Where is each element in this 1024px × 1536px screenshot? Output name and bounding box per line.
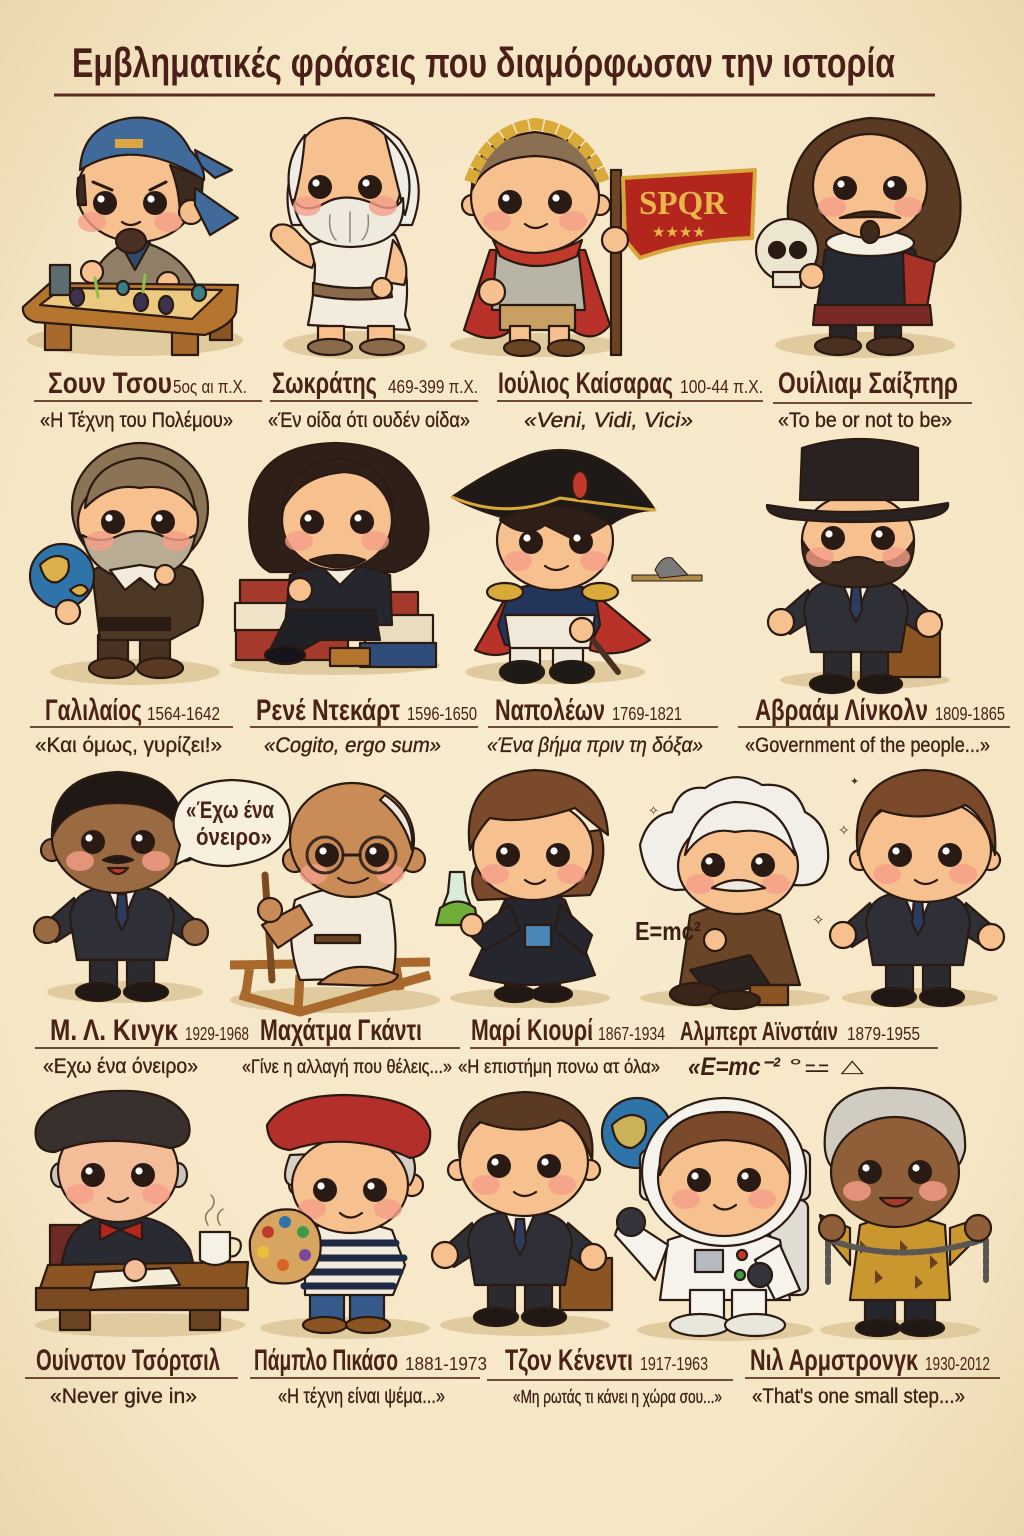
label: Descartes: «Cogito, ergo sum» <box>262 734 443 757</box>
label: Napoleon: 1769-1821 <box>612 704 682 724</box>
figure: Gandhi on wooden frame <box>230 783 440 1013</box>
icon: small cannon <box>632 558 702 581</box>
label: M. L. King: 1929-1968 <box>185 1024 249 1044</box>
label: Shakespeare: Ουίλιαμ Σαίξπηρ <box>778 367 958 400</box>
equation: E=mc2: ✧ <box>812 911 825 929</box>
label: Descartes: Ρενέ Ντεκάρτ <box>256 694 400 727</box>
equation: E=mc2: E=mc² <box>635 916 701 946</box>
figure: Picasso with palette <box>250 1095 430 1339</box>
label: Napoleon <box>487 694 718 757</box>
label: Sun Tzu: 5ος αι π.Χ. <box>173 377 247 397</box>
label: Napoleon: Ναπολέων <box>495 694 605 727</box>
label: Einstein: Αλμπερτ Αϊνστάιν <box>680 1016 838 1046</box>
figure: Churchill at desk <box>35 1091 248 1337</box>
label: Neil Armstrong: 1930-2012 <box>925 1354 990 1374</box>
label: Churchill: «Never give in» <box>50 1385 197 1408</box>
equation: E=mc2 <box>635 775 859 946</box>
equation: E=mc2: ✦ <box>850 775 859 788</box>
figure: Martin Luther King <box>34 772 208 1003</box>
label: Einstein <box>680 1016 920 1081</box>
label: Julius Caesar: «Veni, Vidi, Vici» <box>522 409 695 432</box>
speech bubble: Dream <box>174 780 290 866</box>
label: Lincoln: «Government of the people...» <box>745 734 990 757</box>
equation: E=mc2: ✧ <box>648 804 659 819</box>
label: Neil Armstrong <box>745 1344 1000 1408</box>
banner text: SPQR: ★★★★ <box>652 223 706 241</box>
figure: Shakespeare with skull <box>756 118 961 358</box>
label: Neil Armstrong: «That's one small step...» <box>752 1385 965 1408</box>
figure: Einstein <box>640 777 830 1009</box>
figure: John F. Kennedy <box>432 1092 612 1336</box>
label: Sun Tzu: «Η Τέχνη του Πολέμου» <box>40 409 233 432</box>
label: Gandhi <box>242 1014 452 1078</box>
label: Julius Caesar: Ιούλιος Καίσαρας <box>498 367 673 400</box>
equation: E=mc2: ✧ <box>838 823 850 839</box>
label: Julius Caesar: 100-44 π.Χ. <box>680 377 763 397</box>
label: Descartes: 1596-1650 <box>407 704 477 724</box>
label: Einstein: «E=mc⁻² <box>688 1053 781 1081</box>
label: Gandhi: Μαχάτμα Γκάντι <box>260 1014 422 1047</box>
figure: astronaut with Earth <box>602 1098 813 1341</box>
label: M. L. King <box>35 1014 460 1078</box>
label: Napoleon: «Ένα βήμα πριν τη δόξα» <box>487 734 703 757</box>
figure: Descartes on books <box>230 443 440 675</box>
label: Kennedy <box>487 1344 733 1407</box>
figure: Marie Curie with flask <box>436 770 610 1008</box>
figure: Socrates <box>271 118 427 359</box>
figure: Mandela with broken chains <box>819 1088 991 1340</box>
figure: Sun Tzu at a game table <box>23 118 243 356</box>
label: Galileo: 1564-1642 <box>147 704 220 724</box>
label: Descartes <box>250 694 478 757</box>
label: Socrates: Σωκράτης <box>272 367 377 400</box>
label: Galileo <box>30 694 233 757</box>
label: Picasso: «Η τέχνη είναι ψέμα...» <box>278 1385 445 1408</box>
label: M. L. King: Μ. Λ. Κινγκ <box>50 1014 178 1047</box>
label: Marie Curie: «Η επιστήμη πονω ατ όλα» <box>458 1057 660 1078</box>
label: Lincoln <box>738 694 1010 757</box>
figure: Lincoln with top hat <box>767 439 950 693</box>
label: Marie Curie: 1867-1934 <box>598 1024 665 1044</box>
speech bubble: Dream: όνειρο» <box>196 824 272 851</box>
label: Kennedy: Τζον Κένεντι <box>505 1344 633 1377</box>
label: Shakespeare <box>773 367 972 432</box>
label: Galileo: Γαλιλαίος <box>45 694 142 727</box>
label: Einstein: 1879-1955 <box>847 1024 920 1044</box>
label: Gandhi: «Γίνε η αλλαγή που θέλεις...» <box>242 1057 452 1078</box>
label: Einstein: °⚍ △ <box>788 1056 864 1077</box>
speech bubble: Dream: «Έχω ένα <box>186 797 274 824</box>
label: Julius Caesar <box>497 367 763 432</box>
label: Marie Curie <box>458 1014 938 1078</box>
label: Kennedy: 1917-1963 <box>640 1354 708 1374</box>
label: Socrates: «Έν οίδα ότι ουδέν οίδα» <box>268 409 470 432</box>
figure: Napoleon with bicorne <box>452 450 655 684</box>
label: Neil Armstrong: Νιλ Αρμστρονγκ <box>750 1344 918 1377</box>
figure: Galileo with globe <box>30 443 220 685</box>
label: Socrates <box>268 367 478 432</box>
figure: Julius Caesar with SPQR banner <box>450 124 755 357</box>
figure: young man in suit (row 3) <box>830 770 1004 1008</box>
label: M. L. King: «Εχω ένα όνειρο» <box>43 1055 198 1078</box>
label: Churchill: Ουίνστον Τσόρτσιλ <box>36 1344 220 1377</box>
label: Galileo: «Και όμως, γυρίζει!» <box>35 734 222 757</box>
banner text: SPQR <box>639 185 727 241</box>
label: Lincoln: Αβραάμ Λίνκολν <box>755 694 928 727</box>
label: Sun Tzu <box>34 367 262 432</box>
label: Lincoln: 1809-1865 <box>935 704 1005 724</box>
label: Picasso: Πάμπλο Πικάσο <box>254 1344 398 1377</box>
label: Sun Tzu: Σουν Τσου <box>48 367 172 400</box>
label: Picasso <box>250 1344 487 1408</box>
label: Kennedy: «Μη ρωτάς τι κάνει η χώρα σου...» <box>513 1387 722 1407</box>
banner text: SPQR: SPQR <box>639 185 727 222</box>
label: Churchill <box>25 1344 238 1408</box>
label: Shakespeare: «To be or not to be» <box>778 409 952 432</box>
label: Socrates: 469-399 π.Χ. <box>388 377 478 397</box>
label: Marie Curie: Μαρί Κιουρί <box>471 1014 593 1047</box>
label: Picasso: 1881-1973 <box>405 1354 487 1374</box>
